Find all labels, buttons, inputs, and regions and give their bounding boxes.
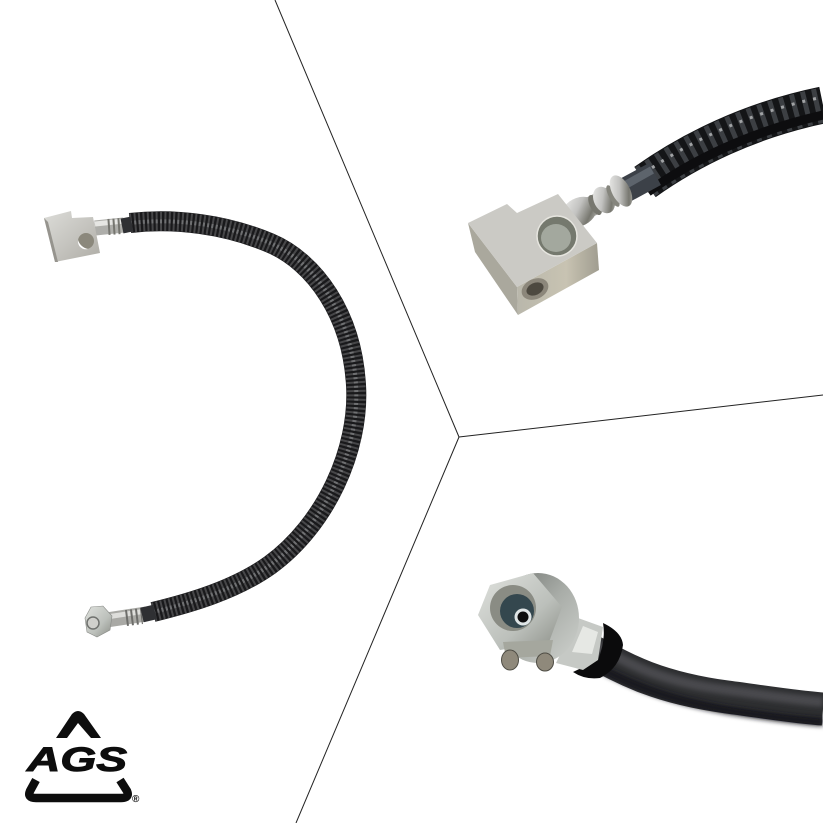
AGS logo	[26, 711, 140, 805]
lower hex nut	[85, 606, 112, 637]
hex nut face	[478, 573, 562, 650]
clip tabs	[502, 640, 554, 671]
ribbed hose close-up	[643, 97, 823, 192]
logo bottom bracket	[29, 780, 128, 798]
upper mounting block	[44, 211, 100, 262]
close-up: hex fitting end	[478, 573, 823, 722]
hose body	[130, 221, 356, 612]
fitting dome	[497, 573, 579, 663]
logo wordmark: AGS	[26, 741, 127, 779]
chrome ferrule	[556, 172, 637, 233]
logo top chevron	[56, 711, 101, 738]
upper ferrule	[95, 221, 132, 228]
crimped ferrule	[556, 618, 603, 670]
close-up: mounting block end	[468, 97, 823, 315]
threaded block	[468, 194, 599, 315]
knurled crimp	[620, 170, 655, 193]
registered mark: ®	[132, 794, 140, 805]
threaded bore	[490, 585, 536, 631]
black collar	[573, 623, 623, 678]
smooth hose close-up	[590, 645, 823, 722]
full brake hose assembly	[44, 211, 356, 637]
divider lines	[275, 0, 823, 823]
lower ferrule	[100, 611, 155, 621]
